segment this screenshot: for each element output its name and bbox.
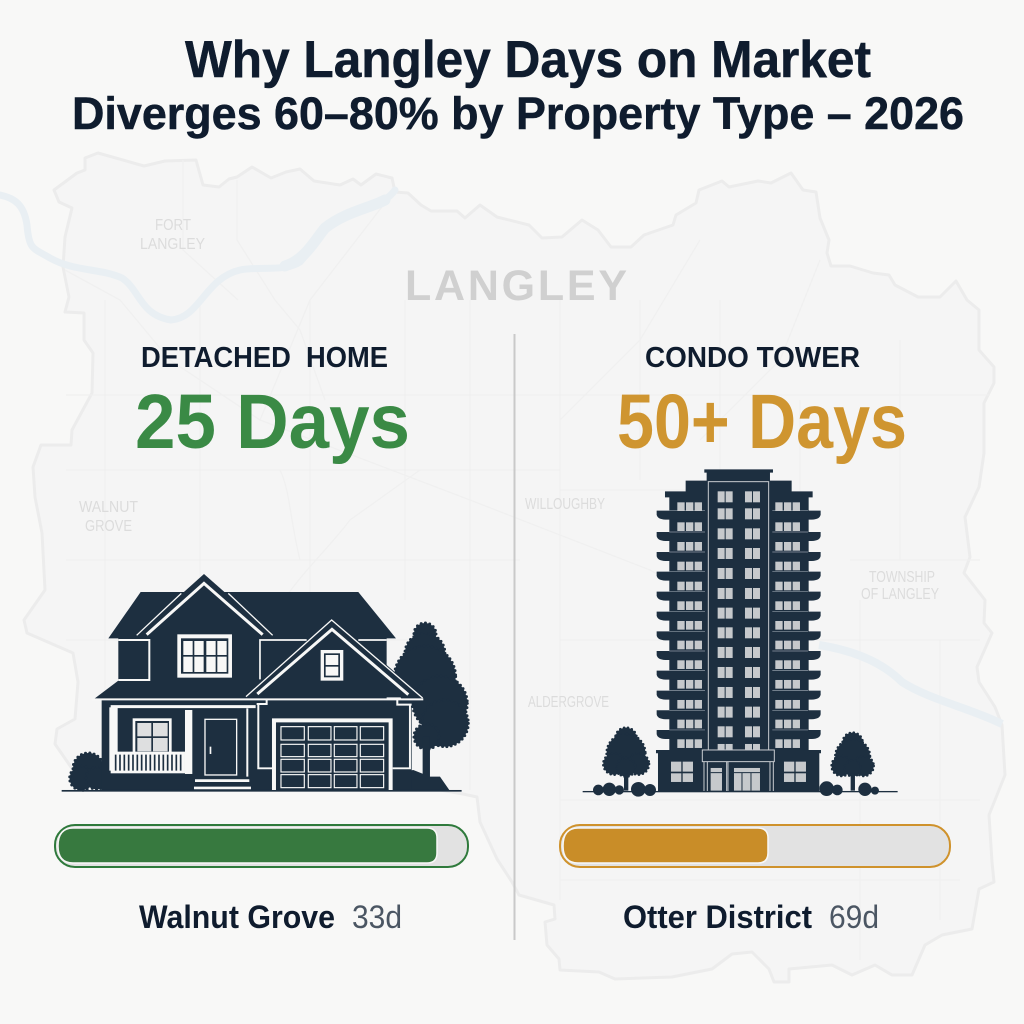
heading: detached home: DETACHED HOME xyxy=(141,342,388,374)
title xyxy=(72,31,964,139)
progress bar: condo tower xyxy=(560,825,950,867)
heading: condo tower: CONDO TOWER xyxy=(645,342,860,374)
progress bar: detached home xyxy=(55,825,468,867)
ground line xyxy=(62,790,462,792)
district stat: Otter District: Otter District xyxy=(623,899,812,935)
map: label Township of Langley xyxy=(861,569,939,603)
panel: condo tower xyxy=(560,342,950,935)
side windows xyxy=(677,502,800,748)
right tree xyxy=(819,733,879,796)
map: label Walnut Grove: GROVE xyxy=(85,518,132,535)
title: Diverges 60–80% by Property Type – 2026 xyxy=(72,88,964,139)
porch window xyxy=(133,718,172,753)
panel: detached home xyxy=(55,342,468,935)
district stat: Otter District: 69d xyxy=(829,899,879,935)
door handle xyxy=(210,747,211,754)
map: label Aldergrove: ALDERGROVE xyxy=(528,694,609,711)
tree crown and bushes xyxy=(70,623,468,790)
title: Why Langley Days on Market xyxy=(185,31,871,89)
steps xyxy=(194,781,251,788)
map: Salmon River xyxy=(819,645,1002,724)
icon: tower xyxy=(583,469,898,797)
gable trims xyxy=(137,593,273,635)
stat: 25 days: 25 Days xyxy=(135,379,410,465)
icon: house xyxy=(62,574,468,792)
canopy and entrance xyxy=(702,750,774,762)
map: municipal boundary xyxy=(24,153,1005,982)
balconies xyxy=(657,511,821,739)
upper wall trims xyxy=(118,640,149,680)
porch beam and right post xyxy=(111,702,256,711)
district stat: Walnut Grove: 33d xyxy=(352,899,402,935)
left tree xyxy=(593,728,656,797)
map: label Walnut Grove: WALNUT xyxy=(79,499,138,516)
map: label LANGLEY: LANGLEY xyxy=(405,262,627,310)
gable window xyxy=(321,650,343,681)
main roof and walls xyxy=(93,592,412,790)
ground line xyxy=(583,791,898,792)
map: label Township of Langley: OF LANGLEY xyxy=(861,586,939,603)
map of Langley xyxy=(0,153,1005,982)
map: label Fort Langley: LANGLEY xyxy=(140,236,205,253)
podium windows xyxy=(671,762,806,782)
upper window xyxy=(177,634,232,678)
porch railing xyxy=(111,752,185,773)
porch posts xyxy=(109,707,118,771)
tower body xyxy=(665,469,813,753)
map: label Walnut Grove xyxy=(79,499,138,535)
podium xyxy=(656,750,821,792)
map: label Fort Langley: FORT xyxy=(155,217,191,234)
district stat: Walnut Grove: Walnut Grove xyxy=(139,899,335,935)
garage door xyxy=(274,720,391,790)
map: faint road network xyxy=(65,160,990,960)
map: label Township of Langley: TOWNSHIP xyxy=(869,569,935,586)
eaves xyxy=(92,699,423,705)
map: label Willoughby: WILLOUGHBY xyxy=(525,496,605,513)
tree trunk and right bush xyxy=(393,737,449,790)
core outline xyxy=(708,482,769,752)
map: label Fort Langley xyxy=(140,217,205,253)
map: Fraser River xyxy=(0,190,395,320)
center divider xyxy=(514,334,516,940)
door xyxy=(205,719,237,775)
central core windows xyxy=(718,491,760,755)
stat: 50+ days: 50+ Days xyxy=(617,379,907,465)
